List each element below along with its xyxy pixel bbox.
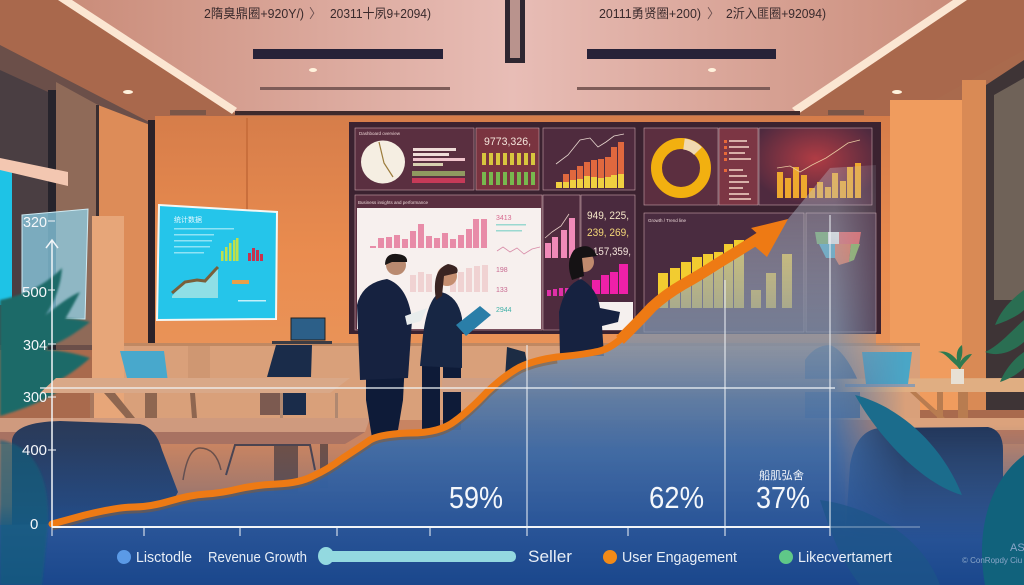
- header date ranges: [204, 6, 826, 21]
- person: woman with folder: [420, 264, 491, 430]
- panel: white chart board: [355, 195, 542, 330]
- panel: donut: [644, 128, 718, 205]
- right glass partition: [986, 60, 1024, 410]
- header date ranges: 20111勇贤圈+200): [599, 6, 701, 21]
- mini bars: [221, 238, 238, 261]
- plant: right foliage: [985, 290, 1024, 382]
- table: right front: [880, 418, 1024, 444]
- panel: numbers: 157,359,: [593, 246, 631, 258]
- laptop: left desk: [120, 351, 210, 386]
- legend: Seller: [528, 547, 572, 566]
- panel: trend bars: [543, 128, 635, 190]
- credenza: [120, 345, 920, 420]
- panel: numbers: 239, 269,: [587, 227, 629, 239]
- plant: left foliage: [0, 268, 90, 416]
- panel: white chart board: 198: [496, 267, 508, 274]
- panel: kpi: [476, 128, 539, 190]
- chart axes and grid: [40, 215, 920, 536]
- header date ranges: 〉: [309, 6, 322, 21]
- office chair: back: [260, 345, 312, 415]
- laptop: right desk: [845, 352, 915, 387]
- main dashboard wall: [349, 122, 881, 334]
- growth curve arrow: [52, 219, 788, 527]
- y axis labels: 304: [23, 337, 47, 354]
- mini red bars: [248, 248, 263, 261]
- panel: white chart board: 2944: [496, 307, 512, 314]
- translucent blue area under curve: [0, 165, 1024, 585]
- percentage callouts: 59%: [449, 480, 503, 515]
- y axis labels: 0: [30, 516, 38, 533]
- panel: list: [719, 128, 758, 205]
- corner credit: [962, 542, 1024, 565]
- panel: kpi: 9773,326,: [484, 136, 531, 148]
- foreground leaves: [0, 395, 1024, 585]
- back wall: [155, 116, 890, 348]
- panel: yellow bars: Growth / Trend line: [648, 218, 687, 223]
- y axis labels: 300: [23, 389, 47, 406]
- legend: Lisctodle: [136, 549, 192, 566]
- table: right: [770, 378, 1024, 420]
- panel: map: [806, 213, 876, 332]
- table: left: [40, 378, 350, 419]
- legend: Likecvertamert: [798, 549, 893, 566]
- left glass partition: [0, 45, 155, 350]
- panel: pink bars: [543, 195, 580, 330]
- y axis labels: 500: [22, 284, 47, 301]
- table: centre: [442, 347, 572, 392]
- background seated figure: [805, 345, 860, 418]
- potted plant on shelf: [938, 345, 972, 384]
- panel: clock: [355, 128, 474, 190]
- panel: clock: Dashboard overview: [359, 131, 401, 136]
- legend: [117, 547, 893, 566]
- chair: front left: [12, 421, 178, 525]
- person: man in suit: [357, 254, 427, 438]
- panel: yellow bars: [644, 213, 804, 332]
- header date ranges: 2沂入匪圈+92094): [726, 6, 826, 21]
- table: front: [0, 418, 370, 494]
- lower blue fade: [0, 445, 845, 535]
- laptop: credenza: [272, 318, 332, 344]
- ceiling: [60, 0, 965, 113]
- mini area chart: [172, 268, 218, 298]
- panel: white chart board: 3413: [496, 215, 512, 222]
- panel: white chart board: 133: [496, 287, 508, 294]
- translucent panel behind axis: [22, 209, 88, 319]
- chair: front right: [845, 427, 1003, 540]
- legend: User Engagement: [622, 549, 738, 566]
- wall presentation screen: 统计数据: [174, 215, 202, 224]
- panel: numbers: 949, 225,: [587, 210, 629, 222]
- floor: [0, 420, 1024, 585]
- wall presentation screen: [157, 205, 277, 320]
- y axis labels: 400: [22, 442, 47, 459]
- percentage callouts: [449, 468, 810, 515]
- legend: Revenue Growth: [208, 549, 307, 566]
- percentage callouts: 37%: [756, 480, 810, 515]
- header date ranges: 〉: [707, 6, 720, 21]
- percentage callouts: 62%: [649, 480, 704, 515]
- panel: bars with line: [759, 128, 872, 205]
- header date ranges: 20311十夙9+2094): [330, 6, 431, 21]
- panel: numbers: [581, 195, 635, 330]
- person: woman at screen: [559, 246, 620, 356]
- panel: white chart board: Business insights and performance: [358, 200, 429, 205]
- percentage callouts: 船肌弘舍: [759, 468, 804, 482]
- y axis labels: [22, 214, 47, 533]
- corner credit: © ConRopdy Ciu: [962, 556, 1022, 565]
- y axis labels: 320: [23, 214, 47, 231]
- header date ranges: 2隋臭鼎圈+920Y/): [204, 6, 304, 21]
- left cyan panel: [0, 158, 68, 305]
